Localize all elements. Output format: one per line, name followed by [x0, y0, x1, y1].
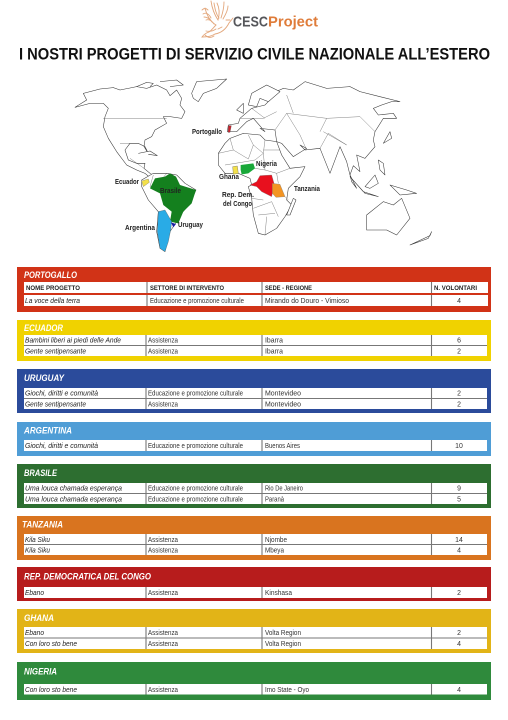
table rows: Ibarra	[265, 338, 283, 344]
table rows: 2	[457, 348, 461, 356]
map labels	[115, 129, 320, 232]
table row	[24, 440, 487, 451]
map: Africa	[218, 126, 305, 235]
table rows: Assistenza	[148, 630, 178, 637]
table rows: 14	[455, 537, 463, 544]
table row: 4	[457, 687, 461, 694]
map: Americas	[75, 79, 227, 252]
map labels: Argentina	[125, 225, 155, 232]
table row	[24, 684, 487, 694]
map labels: Ghana	[219, 174, 239, 181]
table rows: Educazione e promozione culturale	[148, 486, 243, 492]
table rows: Montevideo	[265, 390, 301, 398]
icon: dove	[202, 1, 233, 37]
table rows: Ebano	[25, 630, 44, 637]
country: Ecuador	[142, 179, 149, 187]
heading: Brasile: BRASILE	[24, 468, 58, 479]
table rows: Assistenza	[148, 338, 178, 344]
table header row: N. VOLONTARI	[434, 285, 477, 292]
table rows: Gente sentipensante	[25, 348, 86, 356]
country: Tanzania	[272, 183, 285, 197]
map labels: Ecuador	[115, 179, 139, 186]
panel: Argentina	[17, 422, 491, 456]
country: Brasile	[150, 173, 196, 223]
heading: Nigeria: NIGERIA	[24, 666, 57, 678]
table rows: Paranà	[265, 496, 284, 504]
table rows: 4	[457, 548, 461, 554]
heading: Ghana: GHANA	[24, 613, 54, 624]
table row: 2	[457, 590, 461, 597]
table header row: NOME PROGETTO	[26, 285, 80, 292]
table rows: Rio De Janeiro	[265, 486, 303, 492]
table rows: 4	[457, 641, 461, 648]
table rows: Assistenza	[148, 548, 178, 554]
table rows: Educazione e promozione culturale	[148, 496, 243, 504]
table row: Mirando do Douro - Vimioso	[265, 298, 349, 305]
table rows	[24, 534, 487, 555]
table rows: Bambini liberi ai piedi delle Ande	[25, 338, 121, 344]
table rows: Educazione e promozione culturale	[148, 390, 243, 398]
table row: Educazione e promozione culturale	[150, 298, 244, 305]
map labels: Uruguay	[178, 222, 203, 229]
table rows	[24, 483, 487, 504]
panel: Rep. Democratica del Congo	[17, 567, 491, 601]
heading: Rep. Democratica del Congo: REP. DEMOCRATICA DEL CONGO	[24, 572, 151, 582]
table rows: 6	[457, 338, 461, 344]
map labels: Brasile	[160, 188, 181, 195]
table rows: Mbeya	[265, 548, 284, 554]
map: Eurasia and Oceania	[227, 82, 432, 245]
table rows: Assistenza	[148, 348, 178, 356]
country: Portogallo	[228, 126, 231, 132]
country: Rep. Dem. del Congo	[250, 175, 274, 197]
world map	[75, 79, 432, 252]
table row: Buenos Aires	[265, 443, 300, 450]
panel: Ecuador	[17, 320, 491, 361]
table row: Assistenza	[148, 590, 178, 597]
table rows: Con loro sto bene	[25, 641, 77, 648]
table rows: Volta Region	[265, 641, 301, 648]
logo: CESC Project: Project	[268, 14, 318, 30]
table row: Ebano	[25, 590, 44, 597]
table rows: Giochi, diritti e comunità	[25, 390, 98, 398]
table row: Con loro sto bene	[25, 687, 77, 694]
panel: Tanzania	[17, 516, 491, 560]
table rows: Assistenza	[148, 537, 178, 544]
table row: Assistenza	[148, 687, 178, 694]
panel: Nigeria	[17, 662, 491, 700]
heading: Argentina: ARGENTINA	[23, 426, 72, 436]
panel: Uruguay	[17, 369, 491, 413]
table row: Kinshasa	[265, 590, 292, 597]
table row: 10	[455, 443, 463, 450]
logo: CESC Project	[202, 1, 318, 37]
table row: Imo State - Oyo	[265, 687, 309, 694]
table rows	[24, 388, 487, 409]
table rows: 2	[457, 402, 461, 408]
table rows: Uma louca chamada esperança	[25, 486, 122, 492]
heading: Uruguay: URUGUAY	[24, 373, 65, 384]
table rows: 9	[457, 486, 461, 492]
table row	[24, 587, 487, 598]
panel: Brasile	[17, 464, 491, 508]
table rows: Gente sentipensante	[25, 402, 86, 408]
table rows	[24, 627, 487, 649]
country: Nigeria	[241, 163, 255, 174]
table rows: Kila Siku	[25, 537, 50, 544]
table header row	[24, 282, 488, 293]
map labels: Nigeria	[256, 161, 277, 168]
table row: Giochi, diritti e comunità	[25, 443, 98, 450]
table rows: 2	[457, 390, 461, 398]
heading: Tanzania: TANZANIA	[22, 520, 63, 530]
logo wordmark: CESC	[233, 14, 268, 30]
table rows: 2	[457, 630, 461, 637]
table row: Educazione e promozione culturale	[148, 443, 243, 450]
table rows: Volta Region	[265, 630, 301, 637]
table rows: Uma louca chamada esperança	[25, 496, 122, 504]
map labels: del Congo	[223, 201, 252, 208]
table rows: Assistenza	[148, 641, 178, 648]
map labels: Portogallo	[192, 129, 222, 136]
country: Argentina	[157, 210, 172, 252]
table rows: Montevideo	[265, 402, 301, 408]
table row	[24, 295, 488, 306]
table row: La voce della terra	[25, 298, 80, 305]
country: Uruguay	[171, 222, 176, 227]
table rows: Ibarra	[265, 348, 283, 356]
panel: Portogallo	[17, 267, 491, 312]
heading: Ecuador: ECUADOR	[24, 323, 63, 334]
table rows: Assistenza	[148, 402, 178, 408]
table rows: 5	[457, 496, 461, 504]
table header row: SETTORE DI INTERVENTO	[150, 285, 224, 292]
table row: 4	[457, 298, 461, 305]
table rows: Njombe	[265, 537, 287, 544]
table rows	[24, 335, 487, 356]
panel: Ghana	[17, 609, 491, 653]
map labels: Tanzania	[294, 186, 320, 193]
table header row: SEDE - REGIONE	[265, 285, 313, 292]
heading: Portogallo: PORTOGALLO	[24, 270, 77, 281]
map labels: Rep. Dem.	[222, 192, 254, 199]
country: Ghana	[233, 166, 238, 174]
table rows: Kila Siku	[25, 548, 50, 554]
